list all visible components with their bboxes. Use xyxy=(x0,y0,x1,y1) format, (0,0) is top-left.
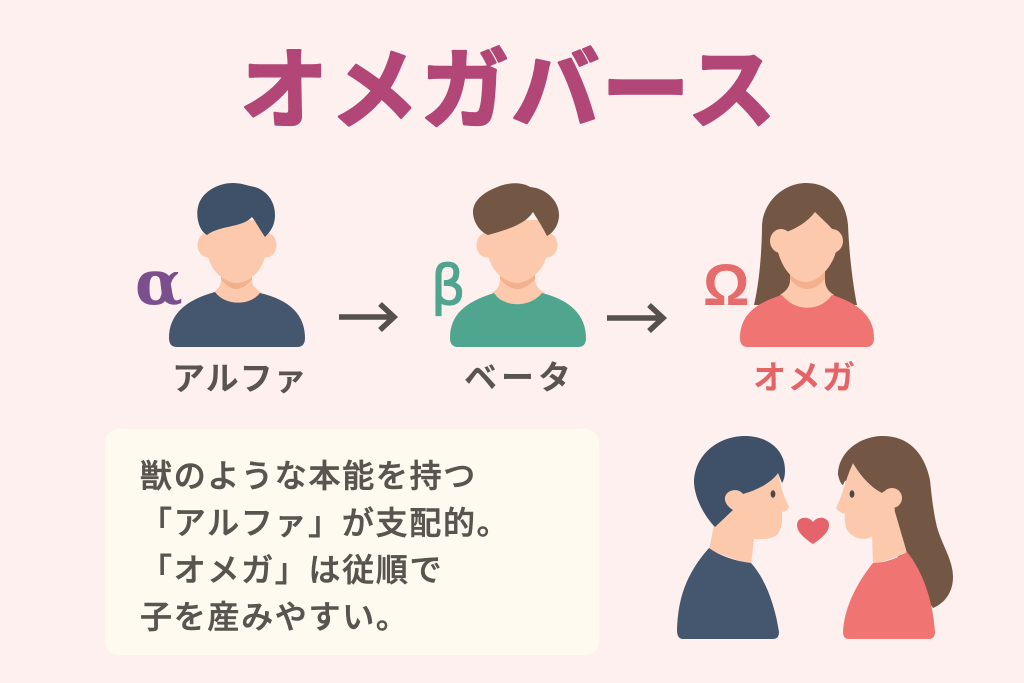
title: オメガバース xyxy=(240,41,778,140)
description text: 子を産みやすい。 xyxy=(140,599,410,635)
description text xyxy=(140,458,510,635)
heart xyxy=(797,518,829,544)
figure: omega xyxy=(703,183,874,347)
woman xyxy=(836,436,953,639)
alpha symbol: α xyxy=(135,246,183,319)
label: omega: オメガ xyxy=(753,359,856,396)
label: alpha: アルファ xyxy=(172,360,308,397)
description text: 獣のような本能を持つ xyxy=(140,458,477,494)
arrow: alpha to beta xyxy=(339,304,394,330)
beta symbol: β xyxy=(431,254,465,317)
label: beta: ベータ xyxy=(464,359,575,396)
figure: alpha xyxy=(135,183,305,347)
illustration: couple xyxy=(677,436,953,639)
arrow: beta to omega xyxy=(607,305,663,331)
omega symbol: Ω xyxy=(703,253,750,318)
panel: description xyxy=(105,429,599,655)
figure: beta xyxy=(431,183,586,347)
man xyxy=(677,436,789,639)
description text: 「アルファ」が支配的。 xyxy=(140,505,510,541)
description text: 「オメガ」は従順で xyxy=(140,552,443,588)
